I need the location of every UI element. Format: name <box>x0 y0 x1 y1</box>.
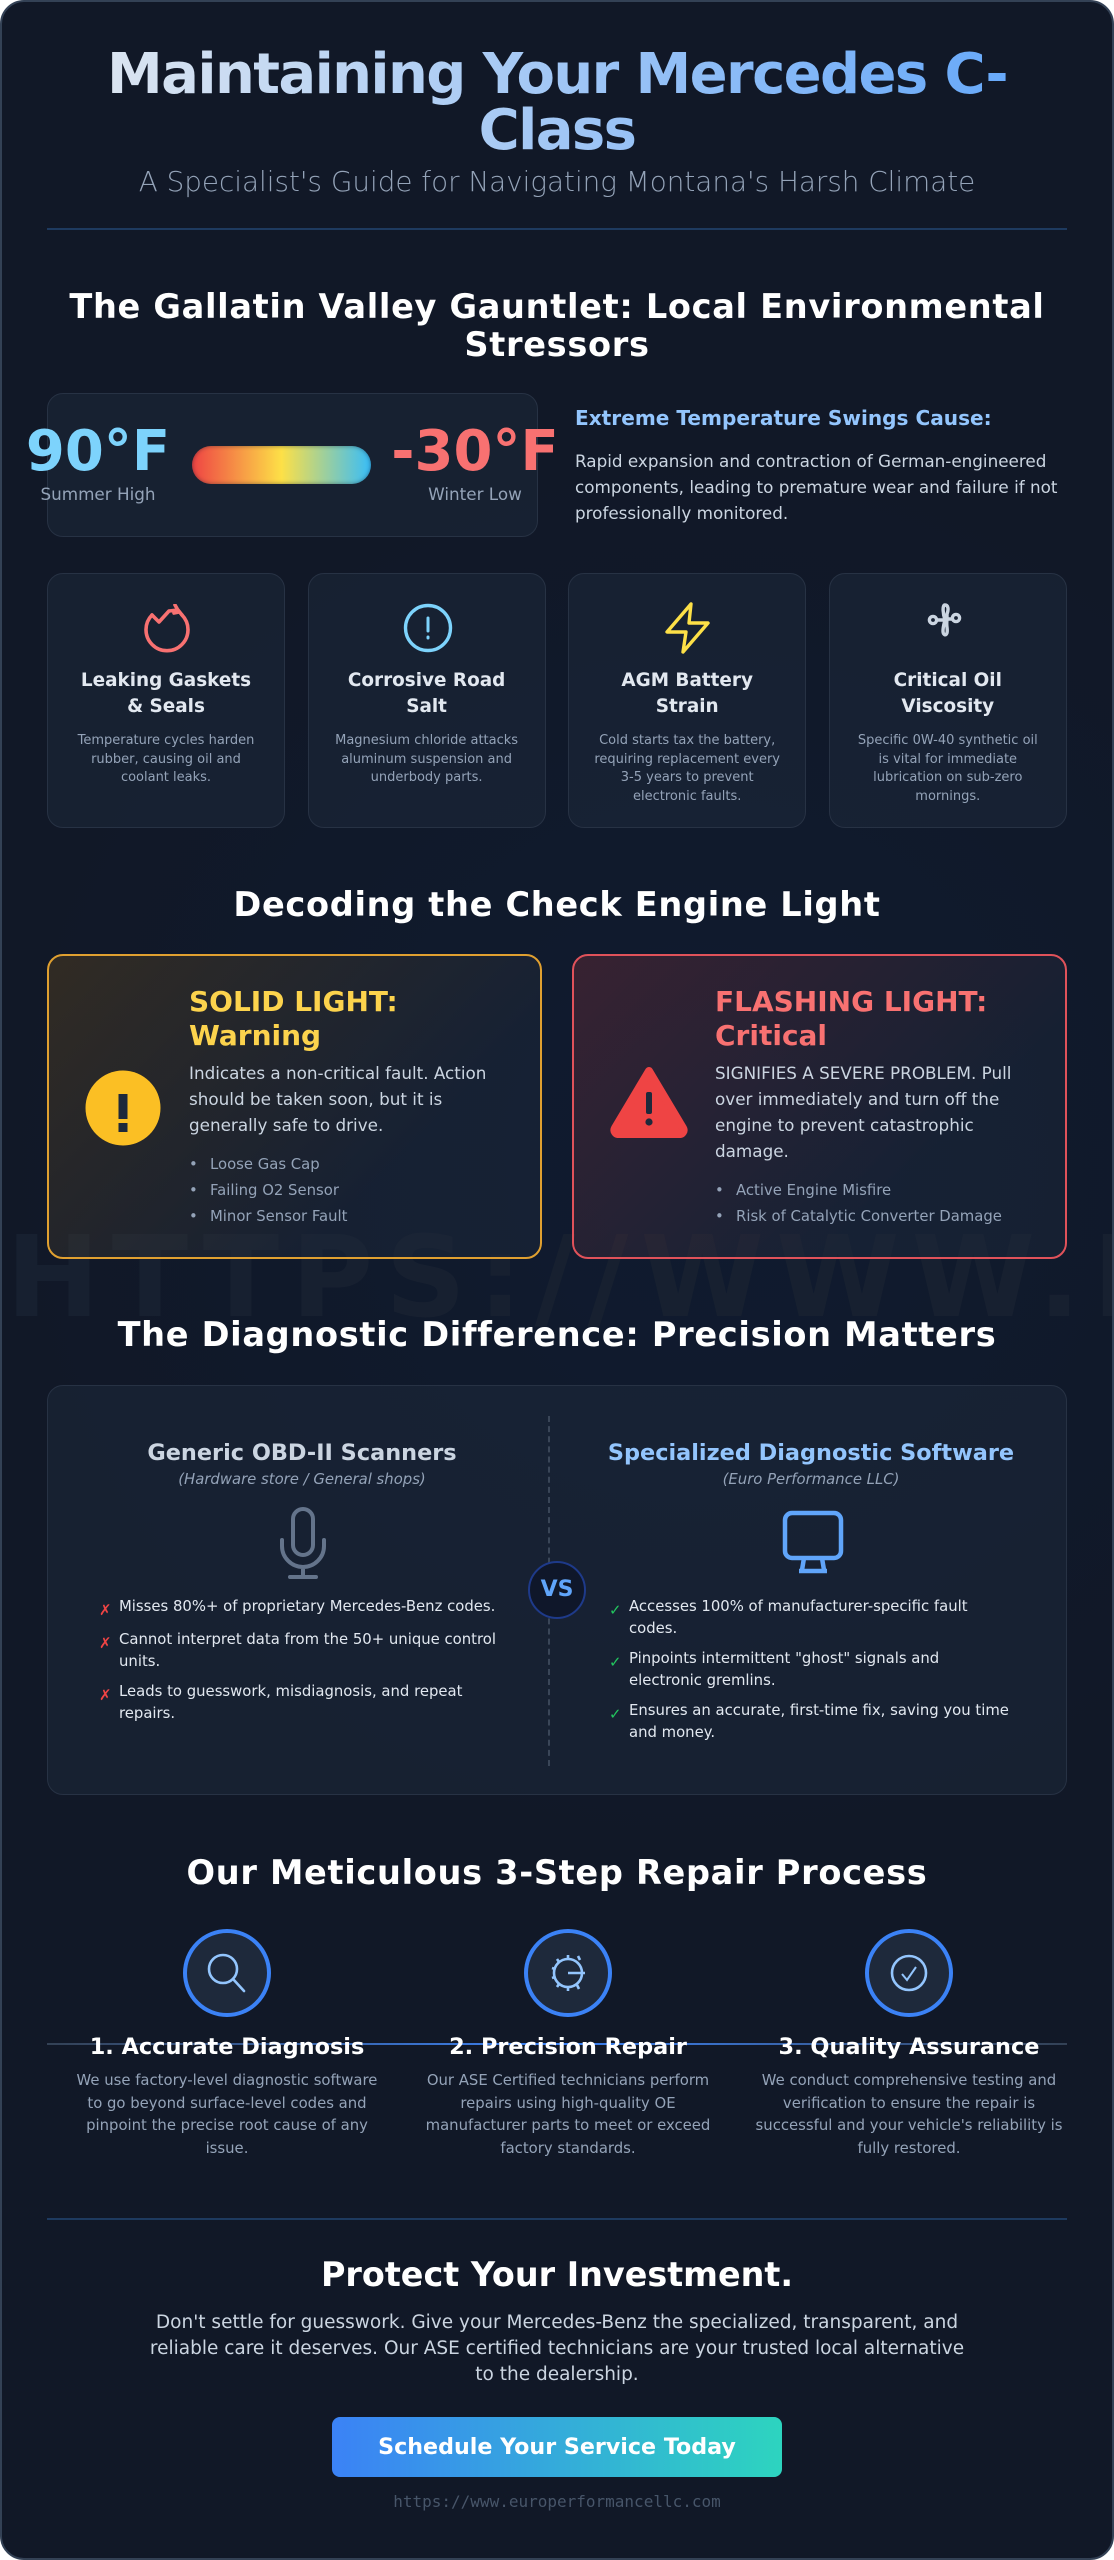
specialized subtitle: (Euro Performance LLC) <box>723 1470 899 1488</box>
step description: manufacturer parts to meet or exceed <box>426 2116 710 2134</box>
specialized list: electronic gremlins. <box>629 1671 776 1689</box>
solid light description: generally safe to drive. <box>189 1115 383 1135</box>
solid light causes list: Minor Sensor Fault <box>210 1207 347 1225</box>
card title <box>894 670 1002 717</box>
card title: Leaking Gaskets <box>81 670 251 691</box>
card description <box>335 733 518 785</box>
step description: We use factory-level diagnostic software <box>77 2071 377 2089</box>
heading: Diagnostic Difference: The Diagnostic Difference: Precision Matters <box>118 1315 996 1354</box>
specialized software column <box>608 1440 1014 1741</box>
step description: fully restored. <box>858 2138 960 2156</box>
solid light title <box>189 985 398 1052</box>
card description <box>594 733 780 804</box>
card description <box>858 733 1038 804</box>
icon: gear <box>524 1929 612 2017</box>
list item <box>609 1597 968 1637</box>
panel: temperature swing <box>47 393 538 537</box>
flashing light title <box>715 985 987 1052</box>
solid light causes list: • <box>189 1155 198 1173</box>
VS badge <box>528 1561 586 1619</box>
heading: Gallatin Valley Gauntlet <box>69 287 1045 364</box>
card title: AGM Battery <box>621 670 753 691</box>
solid light description <box>189 1063 486 1135</box>
generic subtitle: (Hardware store / General shops) <box>178 1470 426 1488</box>
generic list: ✗ <box>99 1601 111 1619</box>
card title: Viscosity <box>901 696 994 717</box>
panel: diagnostic comparison <box>47 1385 1067 1795</box>
title: Maintaining Your Mercedes C- <box>107 42 1007 107</box>
flashing light causes list: • <box>715 1181 724 1199</box>
dashed divider <box>548 1416 550 1766</box>
generic list: ✗ <box>99 1686 111 1704</box>
card description: coolant leaks. <box>121 770 211 785</box>
solid light title: SOLID LIGHT: <box>189 985 398 1018</box>
flashing light description <box>715 1063 1011 1161</box>
list item <box>99 1682 462 1722</box>
card description: Magnesium chloride attacks <box>335 733 518 748</box>
solid light description: should be taken soon, but it is <box>189 1089 442 1109</box>
step title: 2. Precision Repair <box>449 2034 687 2060</box>
flashing light description: damage. <box>715 1141 789 1161</box>
card: corrosive road salt <box>308 573 546 828</box>
card title: & Seals <box>127 696 205 717</box>
temperature explanation <box>575 406 1058 523</box>
specialized list: ✓ <box>609 1601 621 1619</box>
specialized list: Accesses 100% of manufacturer-specific fault <box>629 1597 968 1615</box>
CTA heading: Protect Your Investment. <box>321 2255 793 2294</box>
panel: flashing light <box>572 954 1067 1259</box>
step description: factory standards. <box>500 2138 636 2156</box>
step description: repairs using high-quality OE <box>460 2094 676 2112</box>
step 3: quality assurance <box>729 1929 1089 2169</box>
call to action <box>47 2240 1067 2530</box>
solid light title: Warning <box>189 1019 321 1052</box>
winter low temperature: -30°F <box>391 419 559 484</box>
website URL: https://www.europerformancellc.com <box>393 2492 721 2511</box>
icon: microphone scanner <box>280 1507 326 1579</box>
flashing light causes list <box>715 1181 1002 1225</box>
specialized title: Specialized Diagnostic Software <box>608 1440 1014 1466</box>
icon: magnifier <box>183 1929 271 2017</box>
list item <box>99 1597 495 1619</box>
specialized list: ✓ <box>609 1653 621 1671</box>
specialized list: and money. <box>629 1723 715 1741</box>
step description: Our ASE Certified technicians perform <box>427 2071 709 2089</box>
card description: requiring replacement every <box>594 752 780 767</box>
flashing light description: over immediately and turn off the <box>715 1089 999 1109</box>
generic list: units. <box>119 1652 160 1670</box>
process connector line <box>47 2043 1067 2045</box>
solid light causes list: • <box>189 1207 198 1225</box>
CTA text: reliable care it deserves. Our ASE certified technicians are your trusted local alternative <box>150 2338 964 2359</box>
card description: mornings. <box>915 789 980 804</box>
flashing light title: FLASHING LIGHT: <box>715 985 987 1018</box>
solid light causes list: • <box>189 1181 198 1199</box>
step title: 1. Accurate Diagnosis <box>90 2034 364 2060</box>
card description <box>78 733 254 785</box>
step description: issue. <box>206 2138 248 2156</box>
card title: Strain <box>656 696 719 717</box>
generic title: Generic OBD-II Scanners <box>147 1440 457 1466</box>
specialized list: Ensures an accurate, first-time fix, saving you time <box>629 1701 1009 1719</box>
icon: lightning bolt <box>665 602 710 654</box>
card: critical oil viscosity <box>829 573 1067 828</box>
solid light causes list: Failing O2 Sensor <box>210 1181 339 1199</box>
card description: electronic faults. <box>633 789 741 804</box>
solid light causes list <box>189 1155 348 1225</box>
specialized list: codes. <box>629 1619 677 1637</box>
flashing light causes list: • <box>715 1207 724 1225</box>
specialized list <box>609 1597 1009 1741</box>
card description: Temperature cycles harden <box>78 733 254 748</box>
generic list: Leads to guesswork, misdiagnosis, and repeat <box>119 1682 462 1700</box>
list item <box>609 1701 1009 1741</box>
specialized list: ✓ <box>609 1705 621 1723</box>
icon: oil fan <box>928 603 962 636</box>
card description: Specific 0W-40 synthetic oil <box>858 733 1038 748</box>
flashing light description: engine to prevent catastrophic <box>715 1115 974 1135</box>
step description <box>426 2071 710 2156</box>
specialized list: Pinpoints intermittent "ghost" signals and <box>629 1649 939 1667</box>
icon: gasket <box>144 604 190 652</box>
card description: lubrication on sub-zero <box>873 770 1022 785</box>
step description: pinpoint the precise root cause of any <box>86 2116 368 2134</box>
generic list: Cannot interpret data from the 50+ unique control <box>119 1630 496 1648</box>
list item <box>99 1630 496 1670</box>
icon: warning triangle <box>610 1067 688 1138</box>
list item <box>609 1649 939 1689</box>
card title: Corrosive Road <box>348 670 505 691</box>
card: AGM battery strain <box>568 573 806 828</box>
generic scanners column <box>99 1440 496 1722</box>
CTA text: to the dealership. <box>475 2364 639 2385</box>
header <box>107 42 1007 198</box>
explanation heading: Extreme Temperature Swings Cause: <box>575 406 992 430</box>
temperature gradient bar <box>192 446 371 484</box>
card description: is vital for immediate <box>879 752 1017 767</box>
flashing light causes list: Active Engine Misfire <box>736 1181 891 1199</box>
winter low label: Winter Low <box>428 484 522 504</box>
icon: warning circle <box>86 1070 160 1146</box>
heading: 3-Step Repair Process: Our Meticulous 3-Step Repair Process <box>187 1853 927 1892</box>
subtitle: A Specialist's Guide for Navigating Montana's Harsh Climate <box>139 165 975 198</box>
step description: verification to ensure the repair is <box>783 2094 1035 2112</box>
icon: monitor <box>782 1510 844 1574</box>
heading: Gallatin Valley Gauntlet: The Gallatin Valley Gauntlet: Local Environmental <box>69 287 1045 326</box>
icon: check circle <box>865 1929 953 2017</box>
VS badge: VS <box>541 1577 573 1602</box>
summer high temperature: 90°F <box>26 419 170 484</box>
card title: Critical Oil <box>894 670 1002 691</box>
card title <box>348 670 505 717</box>
generic list: ✗ <box>99 1634 111 1652</box>
step title: 3. Quality Assurance <box>779 2034 1039 2060</box>
step 2: precision repair <box>426 1929 710 2156</box>
card title <box>81 670 251 717</box>
card: leaking gaskets <box>47 573 285 828</box>
explanation text: components, leading to premature wear and failure if not <box>575 477 1057 497</box>
step description: We conduct comprehensive testing and <box>762 2071 1056 2089</box>
generic list <box>99 1597 496 1722</box>
heading: Gallatin Valley Gauntlet: Stressors <box>464 325 650 364</box>
solid light causes list: Loose Gas Cap <box>210 1155 320 1173</box>
step 1: accurate diagnosis <box>77 1929 377 2156</box>
title <box>47 47 1067 159</box>
heading: Check Engine Light: Decoding the Check Engine Light <box>233 885 881 924</box>
step description: successful and your vehicle's reliability is <box>756 2116 1062 2134</box>
flashing light description: SIGNIFIES A SEVERE PROBLEM. Pull <box>715 1063 1011 1083</box>
card title <box>621 670 753 717</box>
CTA button <box>332 2417 782 2477</box>
card description: underbody parts. <box>371 770 483 785</box>
explanation text <box>575 451 1058 523</box>
step description: to go beyond surface-level codes and <box>87 2094 367 2112</box>
flashing light title: Critical <box>715 1019 827 1052</box>
generic list: repairs. <box>119 1704 175 1722</box>
title: Class <box>479 98 635 163</box>
summer high label: Summer High <box>40 484 156 504</box>
card description: Cold starts tax the battery, <box>599 733 775 748</box>
step description <box>77 2071 377 2156</box>
solid light description: Indicates a non-critical fault. Action <box>189 1063 486 1083</box>
explanation text: professionally monitored. <box>575 503 788 523</box>
CTA text <box>47 2310 1067 2388</box>
CTA text: Don't settle for guesswork. Give your Mercedes-Benz the specialized, transparent, and <box>156 2312 958 2333</box>
flashing light causes list: Risk of Catalytic Converter Damage <box>736 1207 1002 1225</box>
card title: Salt <box>406 696 447 717</box>
icon: salt warning <box>404 604 452 652</box>
generic list: Misses 80%+ of proprietary Mercedes-Benz codes. <box>119 1597 495 1615</box>
card description: rubber, causing oil and <box>91 752 241 767</box>
CTA button: Schedule Your Service Today <box>378 2434 736 2460</box>
panel: solid light <box>47 954 542 1259</box>
step description <box>729 2069 1089 2159</box>
card description: aluminum suspension and <box>341 752 512 767</box>
explanation text: Rapid expansion and contraction of German-engineered <box>575 451 1046 471</box>
card description: 3-5 years to prevent <box>621 770 754 785</box>
